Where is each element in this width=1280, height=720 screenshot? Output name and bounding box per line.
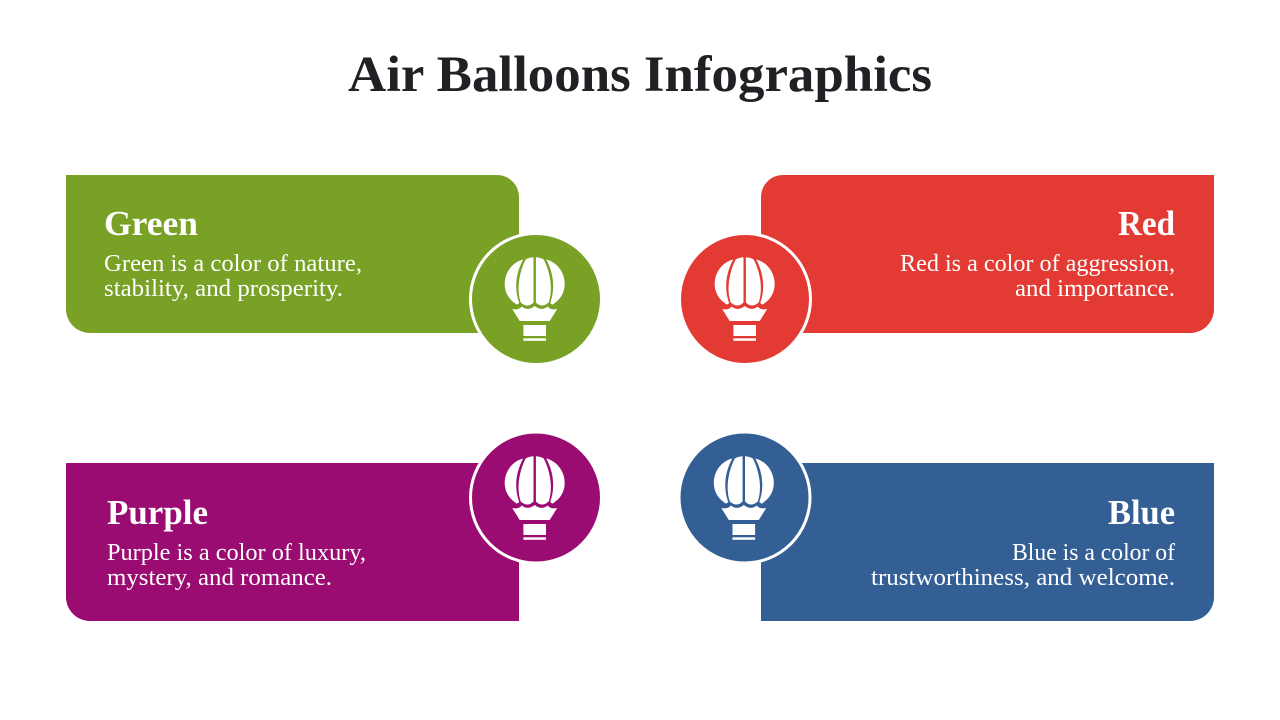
blue description: trustworthiness, and welcome. bbox=[871, 565, 1175, 591]
red description: and importance. bbox=[1015, 276, 1175, 302]
panel: red bbox=[680, 175, 1214, 364]
green card background bbox=[66, 175, 519, 333]
panel: blue bbox=[679, 432, 1214, 621]
panel: green bbox=[66, 175, 602, 364]
purple heading: Purple bbox=[107, 493, 208, 532]
green description: stability, and prosperity. bbox=[104, 276, 343, 302]
panel: purple bbox=[66, 432, 602, 621]
red description: Red is a color of aggression, bbox=[900, 251, 1175, 277]
icon: green balloon badge bbox=[470, 234, 602, 364]
purple description bbox=[107, 540, 366, 591]
purple card background bbox=[66, 463, 519, 621]
green description bbox=[104, 251, 362, 302]
red description bbox=[900, 251, 1175, 302]
icon: blue balloon badge bbox=[679, 432, 810, 563]
blue description bbox=[871, 540, 1175, 591]
purple description: Purple is a color of luxury, bbox=[107, 540, 366, 566]
icon: purple balloon badge bbox=[470, 432, 602, 563]
title: Air Balloons Infographics bbox=[348, 47, 932, 103]
blue card background bbox=[761, 463, 1214, 621]
green description: Green is a color of nature, bbox=[104, 251, 362, 277]
purple description: mystery, and romance. bbox=[107, 565, 332, 591]
blue heading: Blue bbox=[1108, 493, 1175, 532]
red card background bbox=[761, 175, 1214, 333]
icon: red balloon badge bbox=[680, 234, 810, 364]
blue description: Blue is a color of bbox=[1012, 540, 1175, 566]
red heading: Red bbox=[1118, 204, 1176, 243]
green heading: Green bbox=[104, 204, 198, 243]
